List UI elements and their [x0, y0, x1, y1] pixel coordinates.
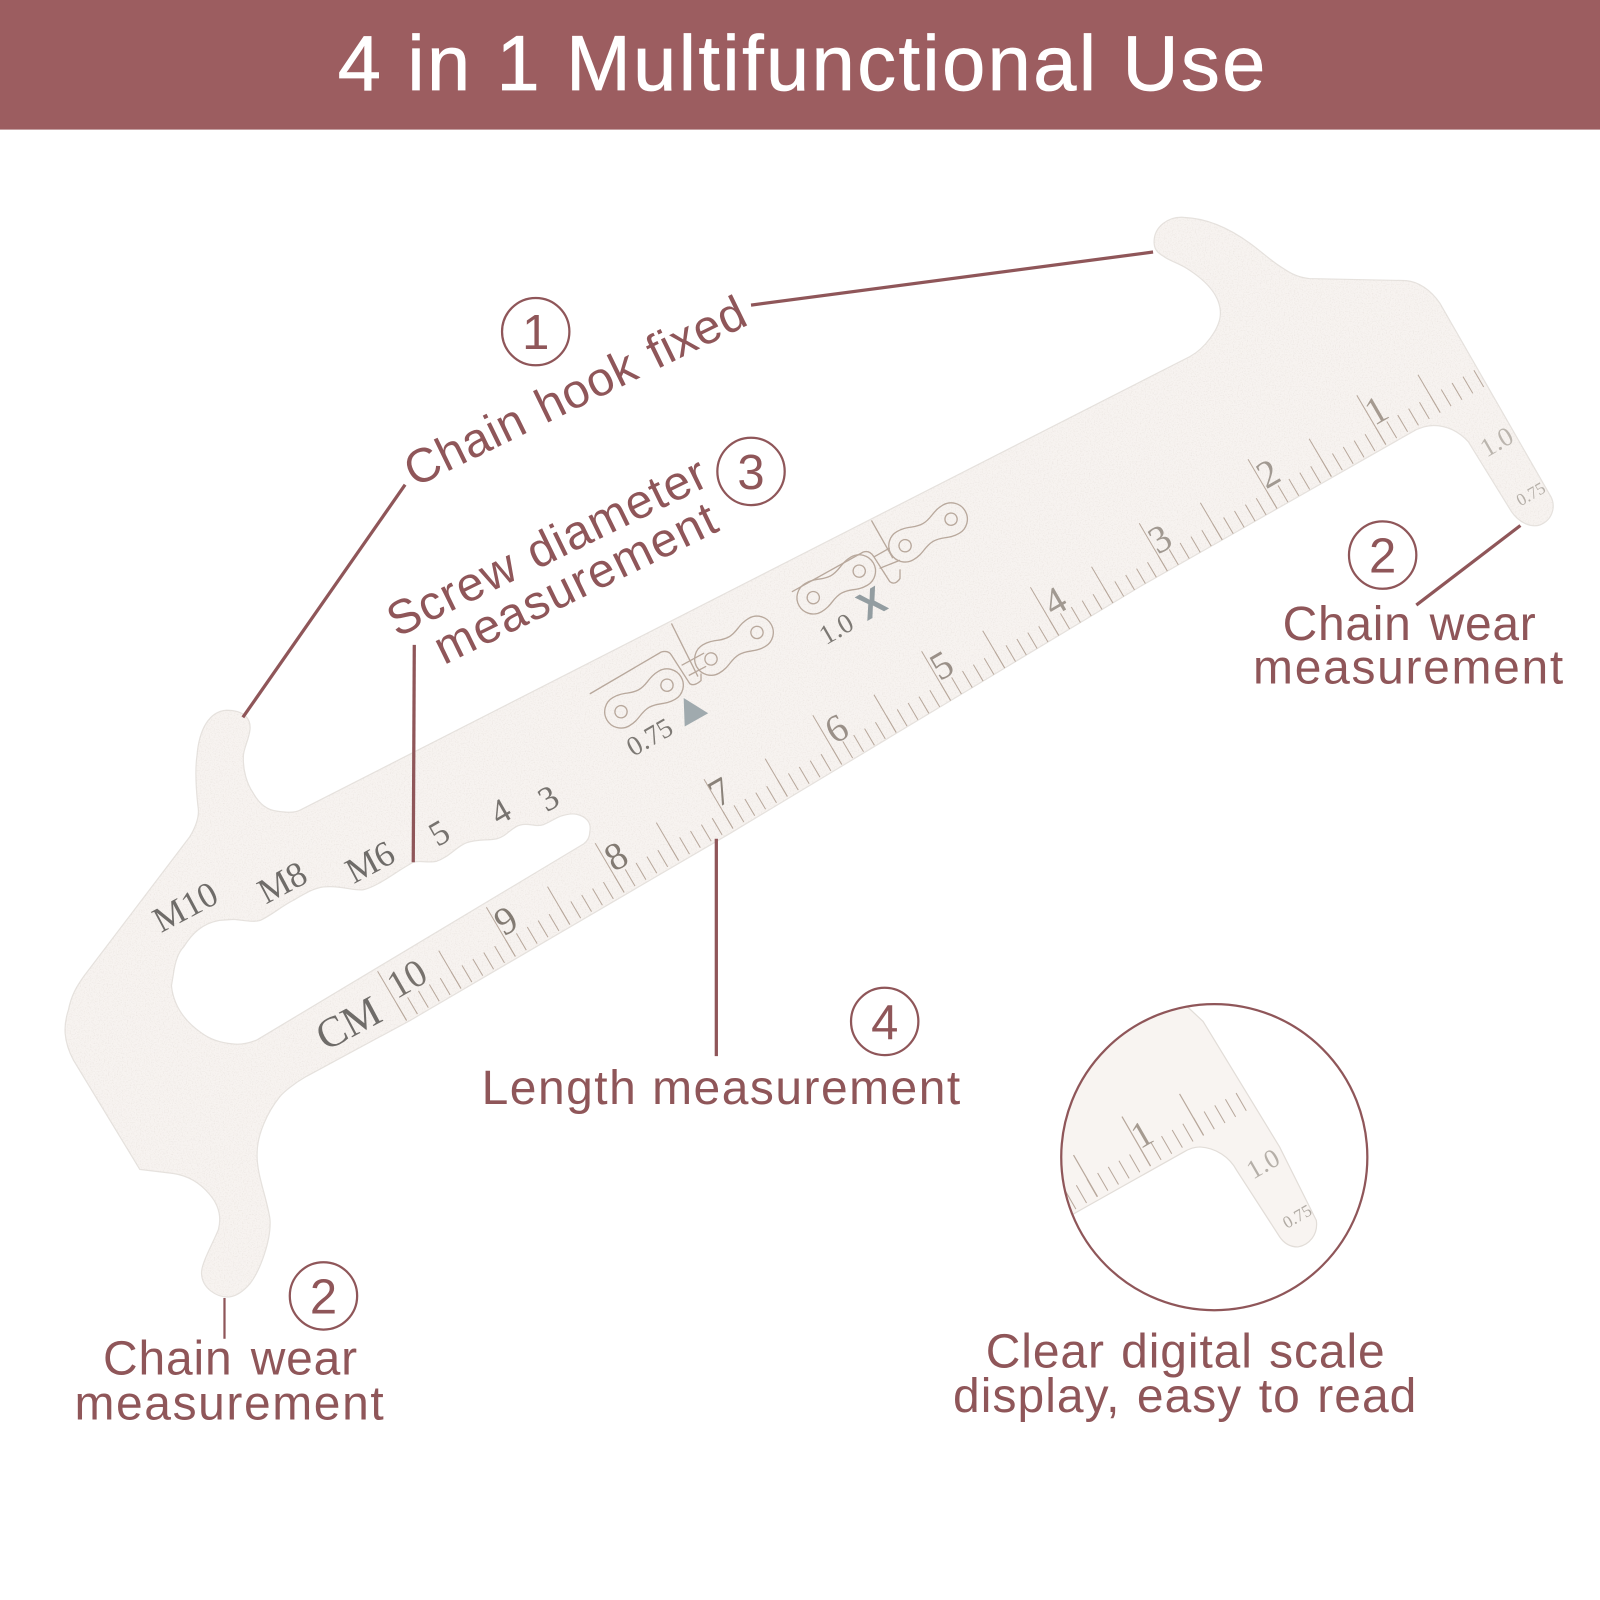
- callout 3: screw diameter: Screw diameter: [379, 447, 715, 648]
- hook tip gauge marks: [1475, 420, 1549, 510]
- callout 1: chain hook: Chain hook fixed: [396, 286, 755, 498]
- screw diameter labels: 5: [422, 812, 456, 854]
- surface speckle: [65, 217, 1553, 1297]
- ruler numbers: [308, 387, 1396, 1060]
- ruler numbers: 10: [379, 951, 435, 1007]
- screw diameter labels: [146, 777, 566, 940]
- magnified scale circle: 1: [1124, 1112, 1160, 1156]
- ruler numbers: 1: [1357, 387, 1396, 434]
- magnified scale circle: [1051, 1004, 1367, 1310]
- screw diameter labels: M6: [339, 833, 401, 891]
- chain gauge tool: [65, 217, 1553, 1297]
- callout 2: chain wear left: Chain wear: [103, 1332, 357, 1385]
- callout 2: chain wear left: measurement: [74, 1377, 384, 1430]
- title banner: [0, 0, 1600, 130]
- hook tip gauge marks: 0.75: [1513, 478, 1549, 510]
- callout 2: chain wear right: [1253, 521, 1563, 695]
- callout 2: chain wear left: [74, 1262, 384, 1430]
- caption: digital scale: [953, 1325, 1416, 1423]
- callout 4: length: 4: [871, 996, 898, 1050]
- ruler numbers: CM: [308, 987, 389, 1060]
- chain wear 0.75 mark: [590, 610, 779, 762]
- callout 2: chain wear right: measurement: [1253, 642, 1563, 695]
- caption: digital scale: Clear digital scale: [986, 1325, 1385, 1378]
- chain wear 1.0 mark: [791, 497, 973, 651]
- magnified scale circle: 1.0: [1241, 1142, 1285, 1185]
- ruler numbers: 2: [1249, 450, 1287, 497]
- callout 2: chain wear left: 2: [310, 1270, 337, 1324]
- callout 4: length: [482, 988, 960, 1115]
- screw diameter labels: M8: [251, 853, 313, 912]
- screw diameter labels: 4: [483, 790, 518, 833]
- callout 4: length: Length measurement: [482, 1062, 960, 1115]
- ruler numbers: 3: [1141, 516, 1179, 563]
- ruler numbers: 8: [597, 833, 635, 880]
- chain wear 1.0 mark: 1.0: [813, 606, 859, 651]
- ruler numbers: 6: [817, 706, 856, 752]
- ruler numbers: 5: [923, 642, 961, 689]
- callout 3: screw diameter: measurement: [425, 492, 726, 675]
- callout 2: chain wear right: 2: [1369, 529, 1396, 583]
- callout 3: screw diameter: 3: [737, 446, 765, 500]
- screw diameter labels: M10: [146, 873, 224, 940]
- caption: digital scale: display, easy to read: [953, 1370, 1416, 1423]
- callout 2: chain wear right: Chain wear: [1283, 598, 1536, 651]
- ruler numbers: 7: [701, 769, 739, 816]
- magnified ticks: [1066, 1092, 1247, 1210]
- chain wear 1.0 mark: X: [850, 579, 894, 629]
- screw diameter labels: 3: [531, 777, 566, 819]
- magnified scale circle: 0.75: [1279, 1201, 1315, 1232]
- leader lines: [224, 252, 1520, 1339]
- ruler numbers: 9: [487, 897, 525, 944]
- hook tip gauge marks: 1.0: [1475, 420, 1518, 463]
- title: 4 in 1 Multifunctional Use: [338, 21, 1265, 107]
- ruler numbers: 4: [1036, 578, 1074, 625]
- callout 1: chain hook: 1: [522, 306, 549, 360]
- ruler ticks: [392, 324, 1545, 1012]
- chain wear 0.75 mark: 0.75: [621, 711, 678, 762]
